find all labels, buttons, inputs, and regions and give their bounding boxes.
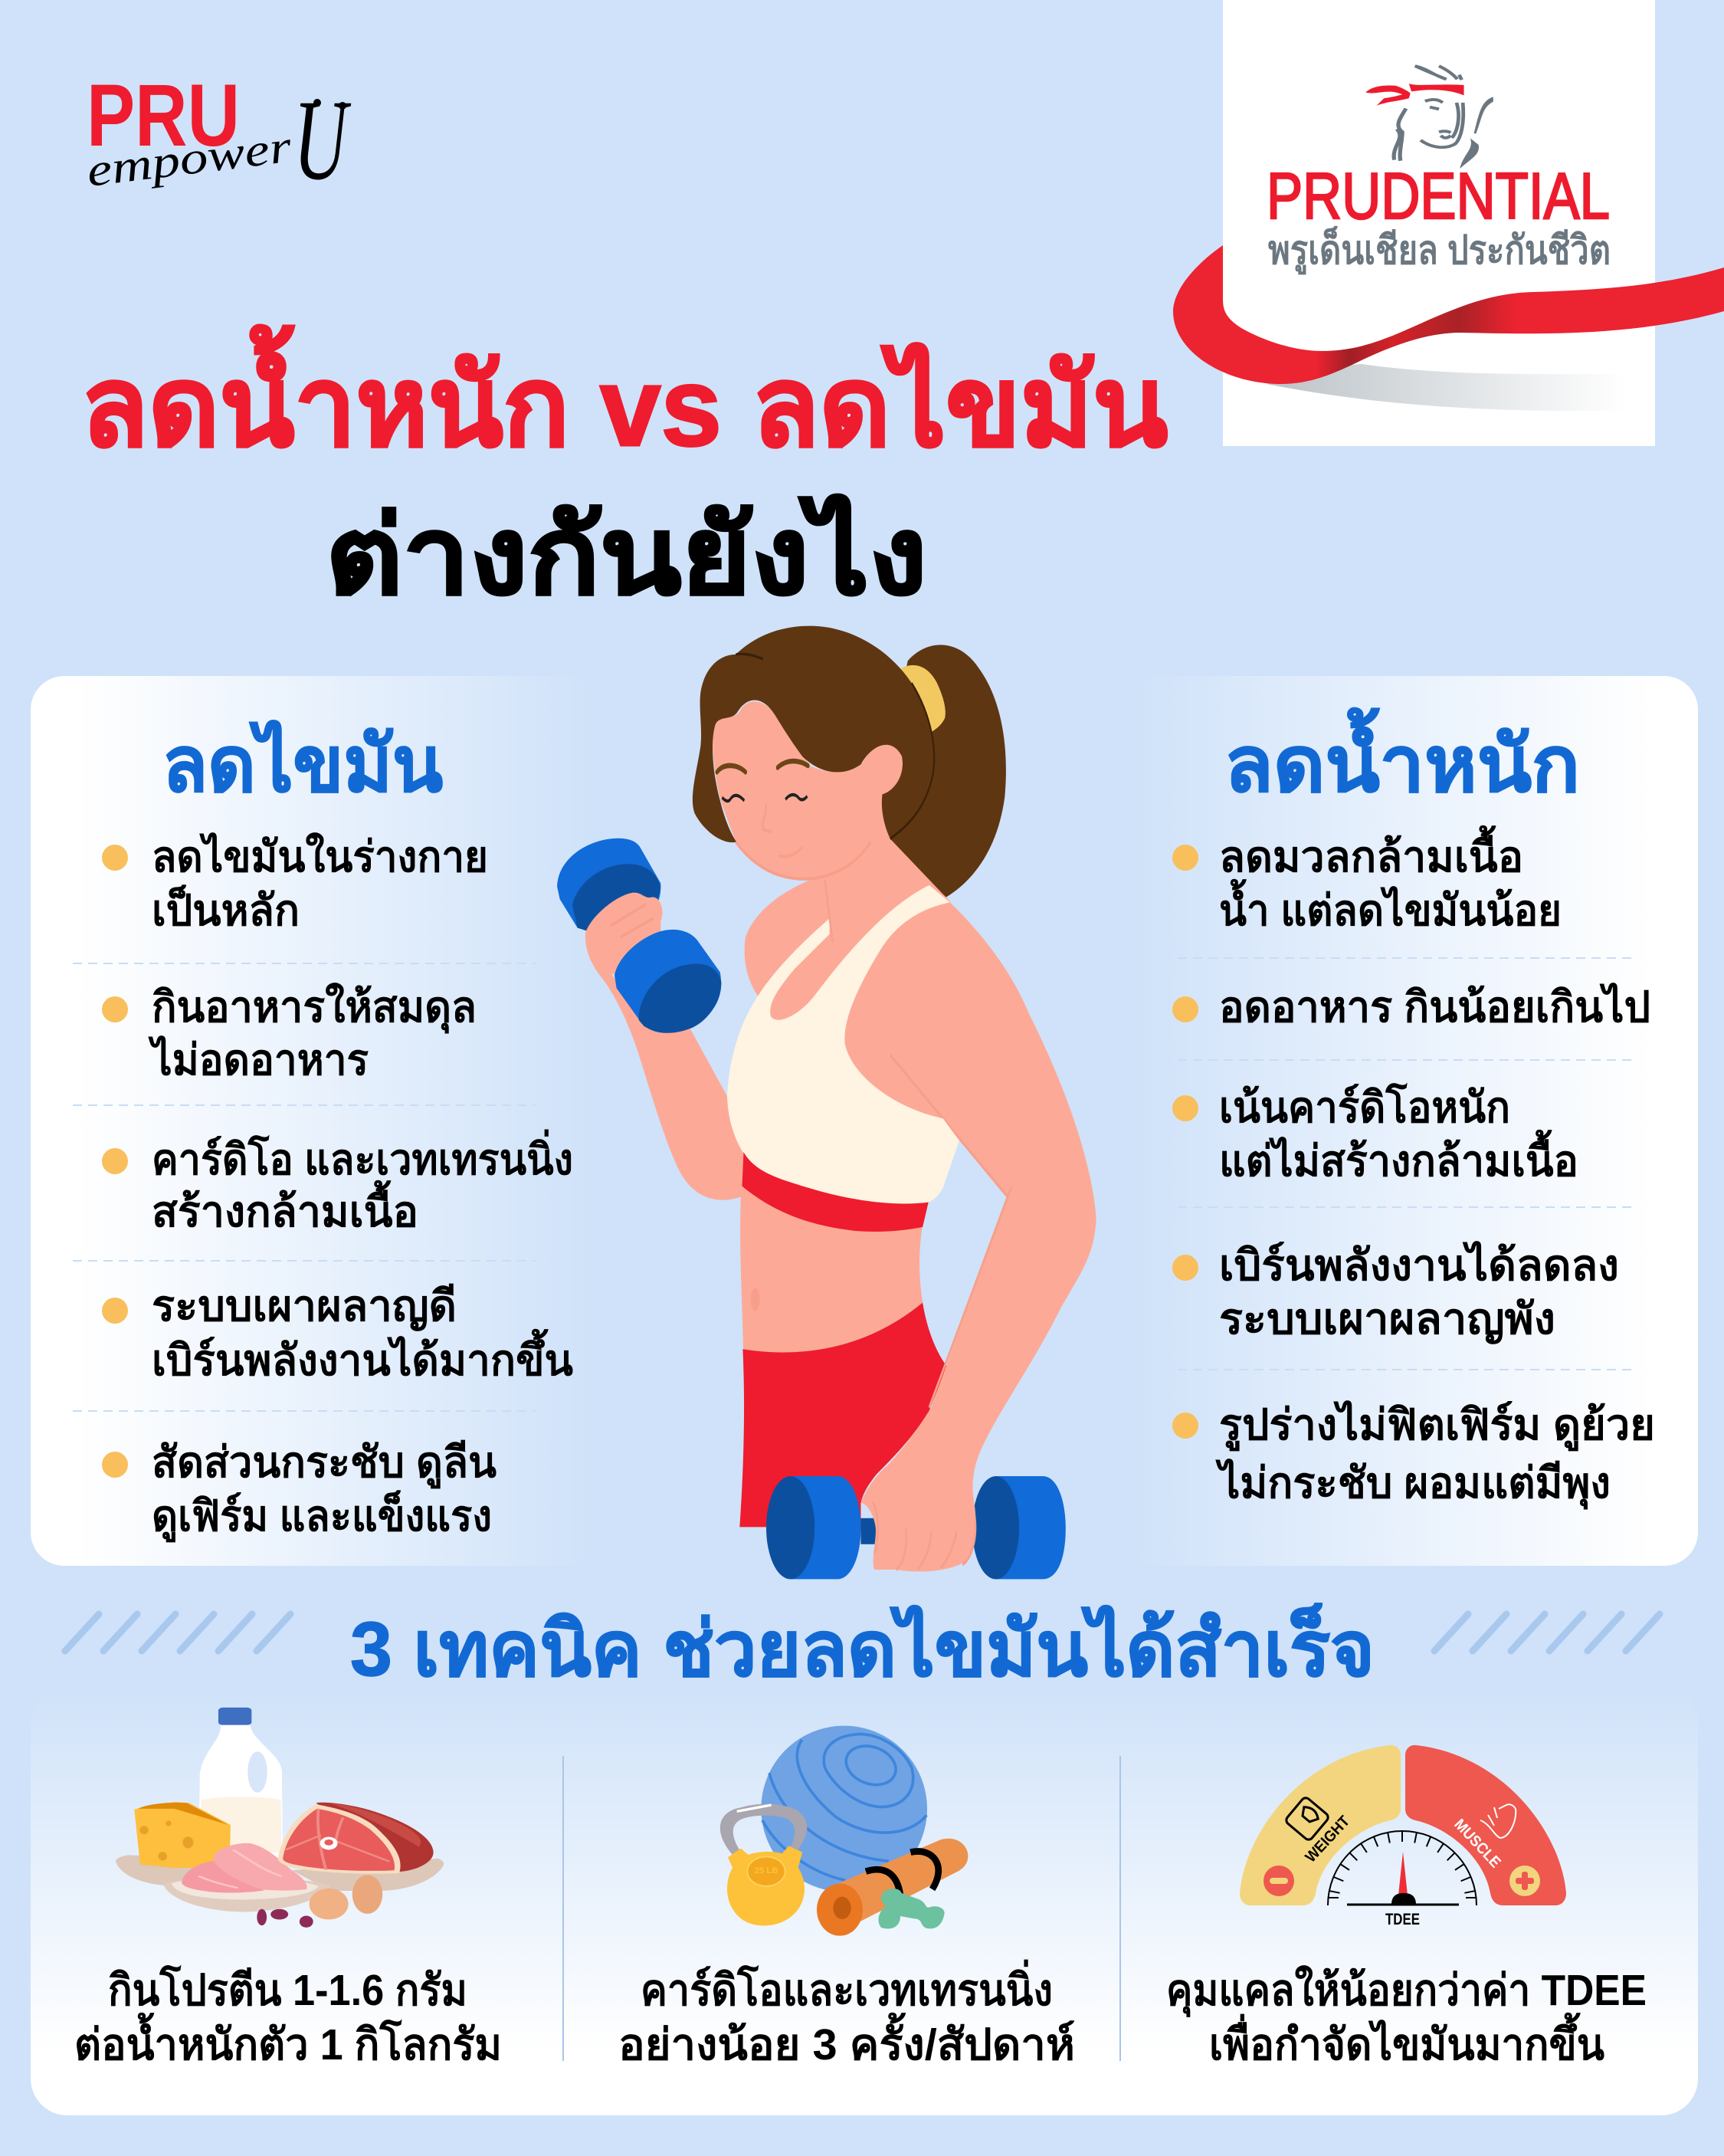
PRU empower U logo [84,67,352,204]
PRU empower U logo: U [293,77,352,204]
item 1 [1172,825,1562,934]
facial features [717,761,870,943]
wordmark: PRUDENTIAL [1267,160,1610,233]
dial [1328,1831,1477,1905]
item 1: เป็นหลัก [152,884,300,934]
upper dumbbell [557,838,721,1033]
caption 3: คุมแคลให้น้อยกว่าค่า TDEE [1166,1964,1647,2018]
shorts [739,1303,947,1527]
item 5: สัดส่วนกระชับ ดูลีน [152,1438,497,1489]
item 4 [102,1281,573,1384]
weight label: WEIGHT [1303,1813,1353,1866]
heading: weight loss: ลดน้ำหนัก [1224,707,1580,808]
left stripes [65,1614,290,1651]
panel: weight loss [1126,676,1698,1566]
item 1 [102,832,488,934]
panel: 3 techniques [31,1686,1698,2115]
item 4: ระบบเผาผลาญดี [152,1281,457,1331]
Prudential logo panel [1173,0,1724,446]
caption 2 [618,1959,1075,2069]
caption 1 [74,1964,502,2069]
caption 2: อย่างน้อย 3 ครั้ง/สัปดาห์ [618,2013,1075,2069]
item 4: เบิร์นพลังงานได้มากขึ้น [152,1329,573,1384]
item 2: ไม่อดอาหาร [148,1035,369,1084]
caption 3: เพื่อกำจัดไขมันมากขึ้น [1209,2013,1604,2069]
right stripes [1434,1614,1660,1651]
item 2 [102,982,477,1084]
item 5 [1172,1400,1655,1510]
caption 3 [1166,1964,1647,2069]
item 3: เน้นคาร์ดิโอหนัก [1219,1082,1510,1131]
caption 1: ต่อน้ำหนักตัว 1 กิโลกรัม [74,2013,502,2069]
muscle label: MUSCLE [1450,1816,1504,1871]
needle [1398,1852,1408,1895]
chest and neck [745,797,951,1026]
icon: scale [1284,1796,1330,1842]
item 3: แต่ไม่สร้างกล้ามเนื้อ [1219,1130,1578,1185]
item 5 [102,1438,497,1543]
item 4: ระบบเผาผลาญพัง [1219,1295,1555,1344]
section heading [65,1603,1660,1692]
item 4: เบิร์นพลังงานได้ลดลง [1219,1240,1619,1289]
minus icon [1264,1866,1294,1896]
face [713,701,903,879]
hair [693,626,934,842]
PRU empower U logo: PRU [87,67,240,165]
illustration: woman lifting dumbbells [557,626,1096,1579]
item 1: ลดไขมันในร่างกาย [152,832,488,881]
hair tie [898,665,946,733]
shadow swoosh [1267,364,1626,411]
item 2: กินอาหารให้สมดุล [152,982,477,1034]
item 3 [102,1129,573,1236]
gauge label: TDEE [1385,1911,1420,1928]
title line 1: ลดน้ำหนัก vs ลดไขมัน [81,324,1168,469]
item 5: รูปร่างไม่ฟิตเฟิร์ม ดูย้วย [1219,1400,1655,1452]
PRU empower U logo: empower [84,121,294,196]
item 2: อดอาหาร กินน้อยเกินไป [1219,982,1650,1031]
bra band [741,1152,929,1232]
icon: gym equipment [720,1726,968,1936]
red ribbon [1173,245,1724,384]
item 3 [1172,1082,1578,1185]
item 1: ลดมวลกล้ามเนื้อ [1219,825,1523,881]
Thai wordmark: พรูเด็นเชียล ประกันชีวิต [1268,226,1611,275]
item 3: คาร์ดิโอ และเวทเทรนนิ่ง [152,1129,573,1183]
item 5: ไม่กระชับ ผอมแต่มีพุง [1215,1458,1611,1510]
item 3: สร้างกล้ามเนื้อ [152,1180,418,1236]
chart: TDEE gauge [1240,1745,1566,1928]
item 1: น้ำ แต่ลดไขมันน้อย [1219,879,1562,934]
title line 2: ต่างกันยังไง [326,494,927,616]
caption 2: คาร์ดิโอและเวทเทรนนิ่ง [641,1959,1053,2015]
plus icon [1509,1866,1540,1896]
right arm [844,887,1096,1571]
item 5: ดูเฟิร์ม และแข็งแรง [152,1489,492,1543]
left arm [585,934,743,1200]
sports bra [727,885,959,1204]
torso [740,1179,929,1376]
icon: gym equipment: 25 LB [755,1866,778,1875]
ponytail [882,645,1006,898]
muscle arc [1405,1745,1566,1905]
icon: protein foods [116,1708,444,1928]
icon: Prudence head [1365,66,1492,166]
heading text: 3 เทคนิค ช่วยลดไขมันได้สำเร็จ [350,1603,1375,1692]
heading: fat loss: ลดไขมัน [162,720,443,808]
item 4 [1172,1240,1619,1344]
weight arc [1240,1745,1401,1905]
icon: flexed arm [1480,1804,1516,1838]
panel: fat loss [31,676,598,1566]
lower dumbbell [766,1476,1066,1579]
caption 1: กินโปรตีน 1-1.6 กรัม [108,1964,467,2015]
